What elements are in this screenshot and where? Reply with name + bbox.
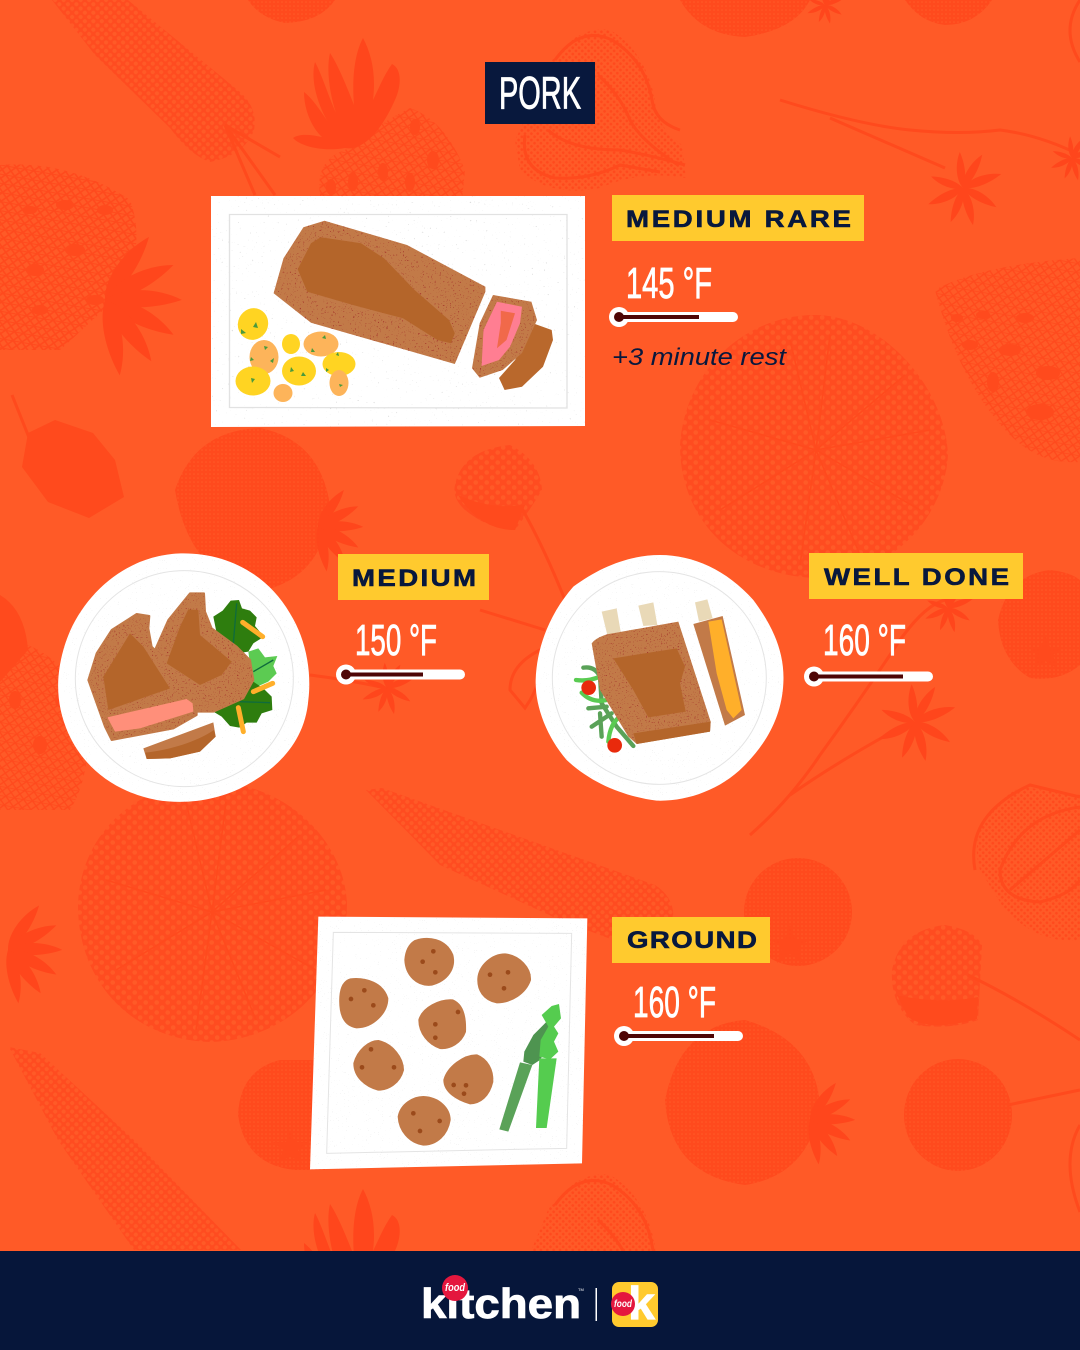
temperature: 150: 150 °F (355, 616, 437, 665)
greens (213, 600, 277, 732)
title: PORK (499, 68, 581, 118)
temperature: 145: 145 °F (626, 259, 712, 308)
label: medium rare (612, 195, 864, 241)
meatballs (341, 939, 530, 1144)
label: medium: MEDIUM (352, 566, 476, 592)
temperature: 160: 160 °F (823, 616, 906, 665)
thermometer (804, 666, 933, 686)
logo: app icon: k (628, 1277, 655, 1329)
temperature: 160: 160 °F (633, 978, 716, 1027)
panel: well done (536, 553, 1023, 801)
label: well done: WELL DONE (824, 565, 1009, 591)
title (485, 62, 595, 124)
whole roast (274, 221, 485, 364)
rib rack (592, 622, 711, 744)
label: well done (809, 553, 1023, 599)
round plate: ribs with herbs (536, 555, 783, 801)
herbs and tomatoes (576, 667, 633, 753)
rib bones (602, 599, 713, 635)
thermometer (609, 307, 738, 327)
thermometer (614, 1026, 743, 1046)
left chop (88, 614, 197, 740)
roast slices (472, 295, 553, 390)
thermometer (336, 664, 465, 684)
logo: food network kitchen: TM (578, 1287, 584, 1292)
asparagus (499, 1004, 561, 1132)
panel: medium rare (211, 195, 864, 427)
logo: app icon: food (614, 1299, 633, 1310)
label: ground: GROUND (627, 928, 757, 954)
panel: ground (310, 917, 770, 1169)
label: ground (612, 917, 770, 963)
footer band (0, 1251, 1080, 1350)
rest note: +3 minute rest (612, 344, 788, 371)
square plate: meatballs with asparagus (310, 917, 587, 1169)
label: medium rare: MEDIUM RARE (626, 207, 851, 233)
panel: medium (58, 553, 489, 802)
meat slice (143, 722, 216, 759)
logo: app icon (611, 1277, 658, 1329)
rib slice (693, 616, 745, 726)
logo: food network kitchen: kitchen (421, 1280, 581, 1327)
right chop (155, 593, 253, 712)
rectangular plate: roast with potatoes (211, 196, 585, 427)
round plate: pork chops with greens (58, 553, 309, 802)
logo: food network kitchen: food (445, 1282, 465, 1294)
potatoes (233, 303, 356, 402)
label: medium (338, 554, 489, 600)
